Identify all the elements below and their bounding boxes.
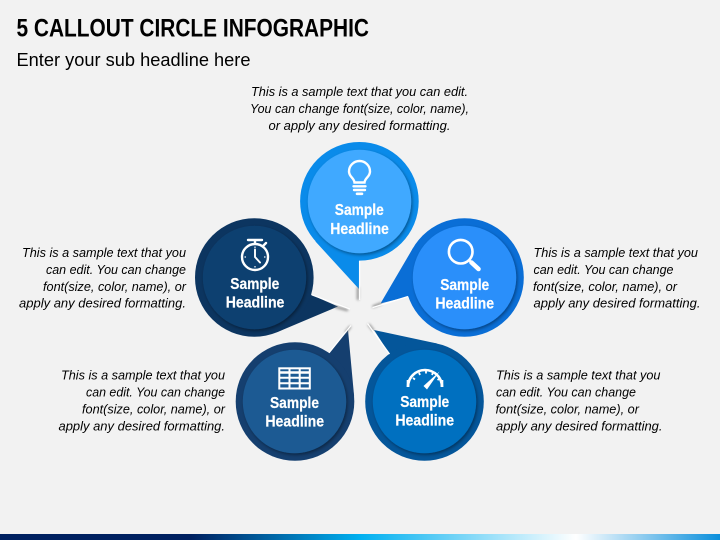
label: bottom right	[395, 394, 454, 430]
text block: bottom left	[58, 368, 226, 434]
label: bottom left: Sample	[270, 395, 319, 412]
label: top	[330, 202, 389, 238]
label: top: Sample	[335, 202, 384, 219]
text block: left: apply any desired formatting.	[19, 296, 186, 310]
subtitle: Enter your sub headline here	[16, 49, 250, 70]
text block: right: apply any desired formatting.	[534, 296, 700, 310]
text block: bottom left: font(size, color, name), or	[82, 402, 226, 416]
text block: left: can edit. You can change	[46, 262, 186, 277]
icon: light bulb	[349, 161, 370, 194]
text block: top: You can change font(size, color, name),	[250, 101, 469, 116]
label: left	[226, 276, 284, 312]
text block: right: font(size, color, name), or	[533, 279, 678, 294]
text block: right: This is a sample text that you	[534, 245, 698, 260]
text block: bottom right: This is a sample text that you	[496, 368, 660, 382]
text block: left: This is a sample text that you	[22, 245, 186, 260]
text block: bottom right: can edit. You can change	[496, 384, 636, 400]
label: bottom right: Headline	[395, 413, 454, 430]
center burst highlights	[312, 261, 408, 354]
text block: right: can edit. You can change	[534, 262, 674, 277]
text block: bottom left: can edit. You can change	[86, 384, 225, 400]
callout: right (search)	[380, 218, 524, 337]
text block: bottom left: apply any desired formatting.	[58, 418, 225, 434]
icon: gauge	[408, 370, 442, 390]
text block: top	[250, 84, 469, 133]
icon: magnifier	[449, 240, 478, 269]
text block: bottom left: This is a sample text that you	[61, 368, 225, 382]
label: bottom left	[265, 395, 324, 431]
text block: bottom right: apply any desired formatting.	[496, 418, 662, 434]
text block: bottom right	[496, 368, 662, 434]
text block: top: or apply any desired formatting.	[268, 118, 450, 133]
callout: top (idea)	[300, 142, 419, 289]
callout: bottom right (speed)	[365, 330, 484, 461]
label: left: Sample	[230, 276, 279, 293]
title: 5 CALLOUT CIRCLE INFOGRAPHIC	[16, 14, 369, 42]
callout: left (time)	[195, 218, 338, 337]
label: left: Headline	[226, 295, 284, 312]
callout: bottom left (table)	[236, 330, 354, 461]
label: right: Sample	[440, 277, 489, 294]
label: bottom right: Sample	[400, 394, 449, 411]
bottom gradient bar	[0, 534, 720, 540]
text block: top: This is a sample text that you can edit.	[251, 84, 468, 99]
label: top: Headline	[330, 221, 389, 238]
label: right	[435, 277, 494, 313]
icon: stopwatch	[242, 240, 268, 270]
label: right: Headline	[435, 296, 494, 313]
label: bottom left: Headline	[265, 414, 324, 431]
icon: table	[279, 368, 310, 389]
text block: left: font(size, color, name), or	[43, 279, 187, 294]
text block: left	[19, 245, 187, 310]
text block: right	[533, 245, 700, 310]
text block: bottom right: font(size, color, name), or	[496, 402, 640, 416]
